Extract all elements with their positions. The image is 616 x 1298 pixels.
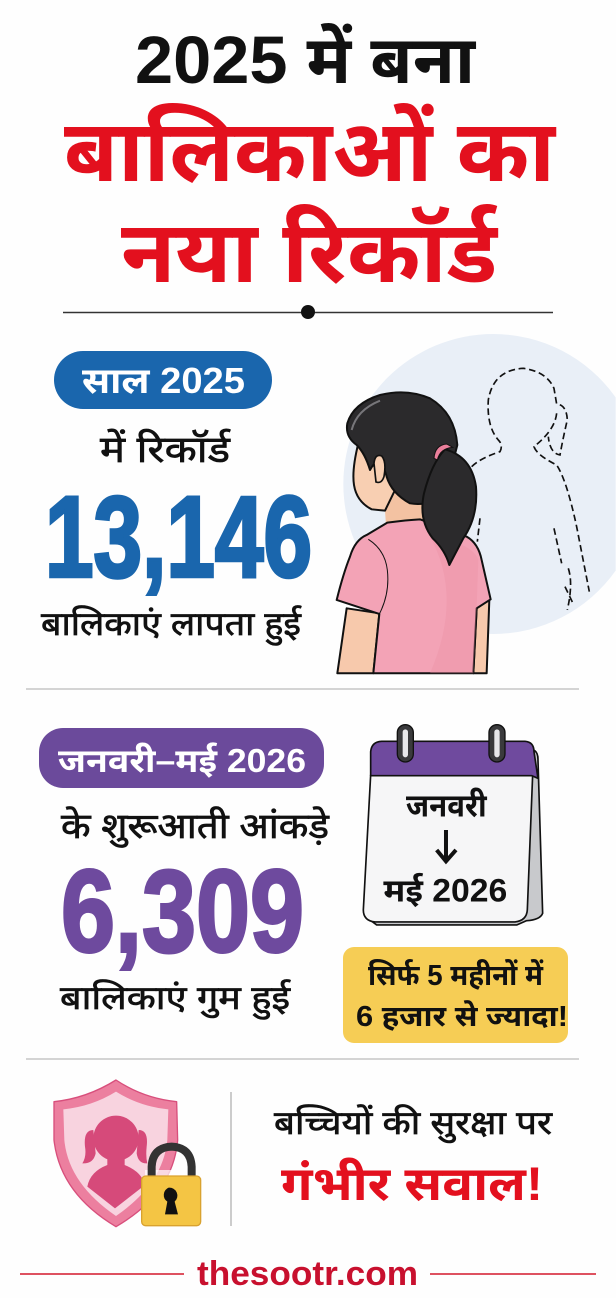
callout: only 5 months: 6 हजार से ज्यादा! [356,999,568,1033]
text: initial figures: के शुरूआती आंकड़े [61,806,330,847]
number: 13,146: 13,146 [45,474,312,602]
title [64,22,556,301]
pill: year 2025: साल 2025 [82,360,245,401]
icon: calendar [363,725,543,925]
callout: only 5 months: सिर्फ 5 महीनों में [368,959,544,992]
pill: year 2025 [54,351,272,409]
icon: calendar: मई 2026 [383,873,507,909]
title: बालिकाओं का [64,103,556,200]
divider dot [301,305,315,319]
text: girls lost: बालिकाएं गुम हुई [60,979,291,1020]
number: 6,309: 6,309 [61,846,304,976]
icon: calendar: जनवरी [406,788,487,824]
pill: January to May 2026 [39,728,324,788]
callout: only 5 months [343,947,568,1043]
pill: January to May 2026: जनवरी–मई 2026 [58,742,306,779]
text: safety of girls: बच्चियों की सुरक्षा पर [274,1104,553,1143]
title: 2025 में बना [135,22,476,98]
text: serious question: गंभीर सवाल! [281,1157,543,1210]
footer brand: thesootr.com [197,1255,418,1293]
title: नया रिकॉर्ड [121,204,498,301]
text: record in: में रिकॉर्ड [100,428,231,470]
icon: shield with girl and lock [54,1080,201,1227]
text: girls missing: बालिकाएं लापता हुई [41,605,302,646]
illustration: girl and missing silhouette [337,334,616,673]
